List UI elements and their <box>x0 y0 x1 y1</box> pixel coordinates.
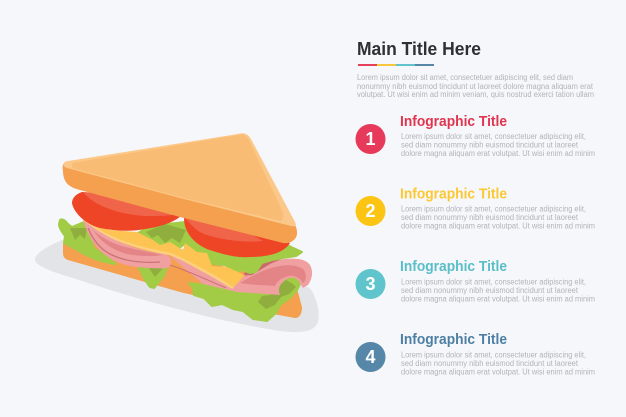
badge 3 <box>356 269 386 299</box>
ham slice right <box>170 256 312 295</box>
item 1 text <box>401 132 595 158</box>
item 4 text <box>401 350 595 376</box>
badge 1 <box>356 124 386 154</box>
item 2 title: Infographic Title <box>400 186 507 202</box>
top bread crust <box>63 162 297 243</box>
main title: Main Title Here <box>357 39 481 59</box>
item 1 <box>356 114 595 158</box>
badge 3: 3 <box>365 274 376 294</box>
intro text: volutpat. Ut wisi enim ad minim veniam, quis nostrud exerci tation ullam <box>357 90 594 99</box>
intro text <box>357 73 594 99</box>
left lettuce <box>59 219 116 264</box>
item 4 text: Lorem ipsum dolor sit amet, consectetuer adipiscing elit, <box>401 350 586 360</box>
ham slice left <box>83 220 171 268</box>
item 1 text: Lorem ipsum dolor sit amet, consectetuer adipiscing elit, <box>401 132 586 141</box>
item 2 <box>356 186 595 230</box>
item 3 <box>356 259 595 304</box>
lower small lettuce <box>138 266 167 288</box>
item 4 <box>356 332 595 376</box>
item 1 text: dolore magna aliquam erat volutpat. Ut wisi enim ad minim <box>401 149 595 158</box>
item 4 text: sed diam nonummy nibh euismod tincidunt ut laoreet <box>401 359 579 368</box>
item 1 title: Infographic Title <box>400 114 507 130</box>
badge 4 <box>356 342 386 372</box>
title underline <box>358 64 434 66</box>
sandwich illustration <box>35 133 319 332</box>
ground shadow <box>35 240 319 332</box>
item 2 text: sed diam nonummy nibh euismod tincidunt ut laoreet <box>401 213 579 222</box>
intro text: nonummy nibh euismod tincidunt ut laoreet dolore magna aliquam erat <box>357 82 594 91</box>
item 3 text <box>401 278 595 304</box>
item 4 title: Infographic Title <box>400 332 507 348</box>
badge 4: 4 <box>365 347 376 367</box>
badge 1: 1 <box>365 129 376 149</box>
cheese <box>84 218 245 288</box>
tomato left <box>72 192 182 231</box>
item 1 text: sed diam nonummy nibh euismod tincidunt ut laoreet <box>401 140 579 150</box>
item 3 text: sed diam nonummy nibh euismod tincidunt ut laoreet <box>401 286 579 295</box>
item 3 text: dolore magna aliquam erat volutpat. Ut wisi enim ad minim <box>401 294 595 304</box>
item 2 text <box>401 204 595 230</box>
item 2 text: Lorem ipsum dolor sit amet, consectetuer adipiscing elit, <box>401 204 586 214</box>
mid lettuce <box>138 222 302 273</box>
bottom right lettuce <box>189 277 301 321</box>
top bread face <box>63 133 296 226</box>
intro text: Lorem ipsum dolor sit amet, consectetuer adipiscing elit, sed diam <box>357 73 573 82</box>
item 3 title: Infographic Title <box>400 259 507 275</box>
badge 2: 2 <box>365 201 376 221</box>
bottom bread <box>63 240 302 318</box>
item 3 text: Lorem ipsum dolor sit amet, consectetuer adipiscing elit, <box>401 278 586 286</box>
item 2 text: dolore magna aliquam erat volutpat. Ut wisi enim ad minim <box>401 222 595 230</box>
badge 2 <box>356 196 386 226</box>
item 4 text: dolore magna aliquam erat volutpat. Ut wisi enim ad minim <box>401 368 595 376</box>
tomato right <box>184 218 290 257</box>
